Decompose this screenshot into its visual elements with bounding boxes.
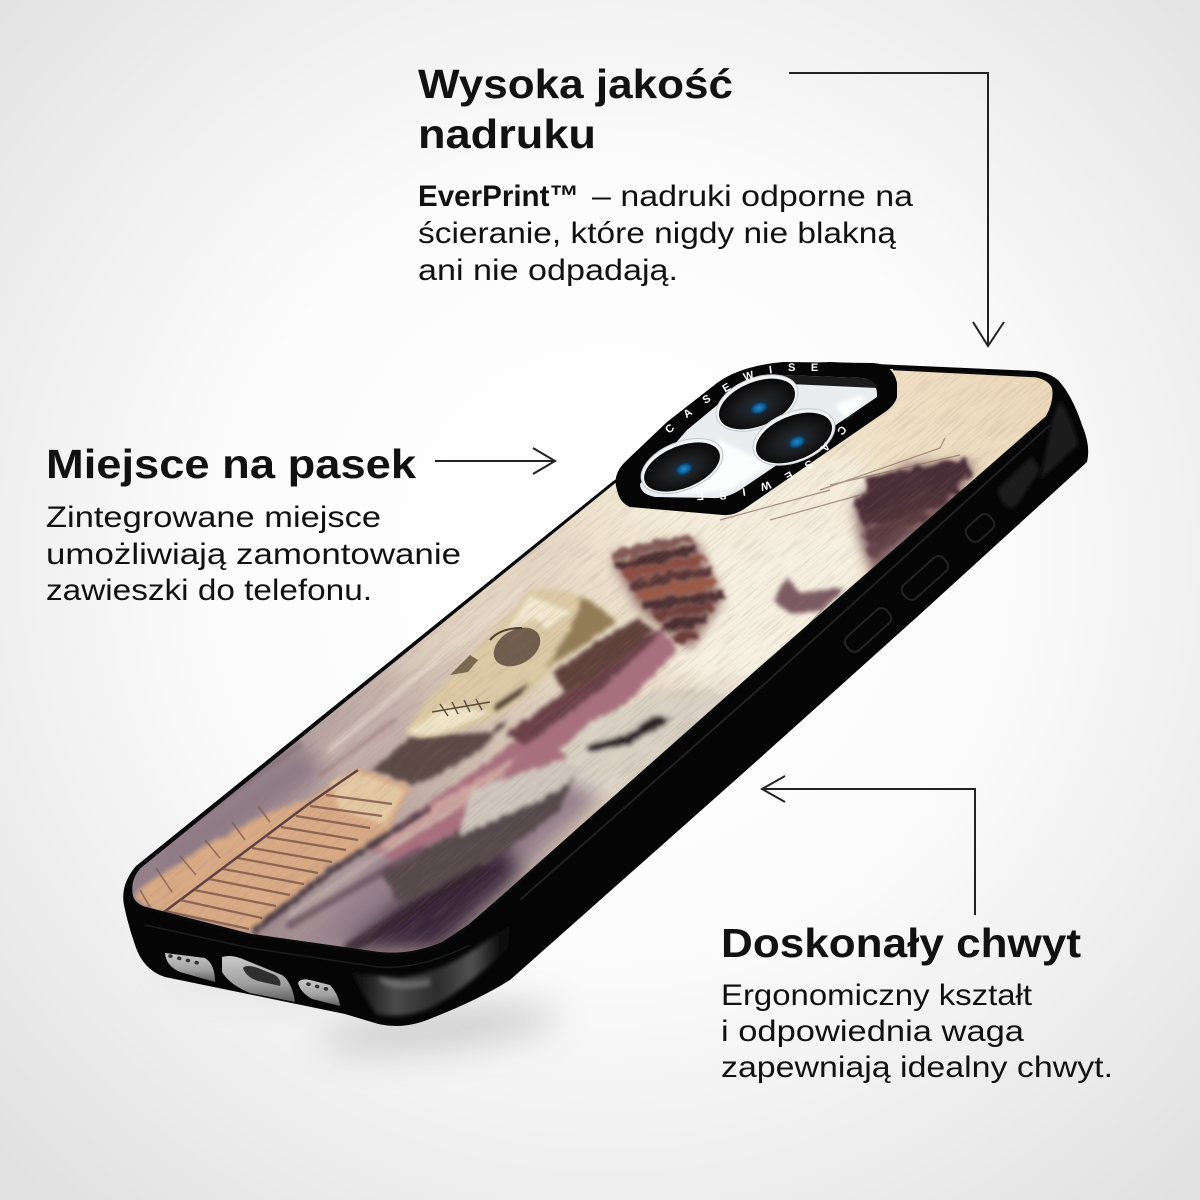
phone case illustration xyxy=(123,362,1088,1026)
arrow: to case side xyxy=(762,776,975,915)
ring wordmark xyxy=(666,363,846,500)
speaker left xyxy=(165,953,215,982)
body text: grip xyxy=(721,979,1113,1084)
dark collar xyxy=(372,718,510,785)
callout: print quality xyxy=(418,61,1004,346)
feather lines xyxy=(720,438,960,626)
callout: strap slot xyxy=(46,441,555,607)
printed artwork xyxy=(132,369,1052,953)
pink strip xyxy=(365,628,678,860)
body text: print quality: ani nie odpadają. xyxy=(418,254,678,287)
heading: print quality xyxy=(418,61,733,157)
lower feather shadow xyxy=(773,577,845,614)
speaker right xyxy=(298,979,340,1006)
feather: dark upper right xyxy=(857,468,970,555)
body text: grip: zapewniają idealny chwyt. xyxy=(721,1051,1113,1084)
body text: grip: i odpowiednia waga xyxy=(721,1015,1024,1048)
action button xyxy=(963,511,997,545)
body text: strap slot: zawieszki do telefonu. xyxy=(46,574,372,607)
feather: soft mass xyxy=(855,462,975,580)
body text: print quality xyxy=(418,180,913,287)
phone shadow xyxy=(155,960,561,1060)
body text: strap slot xyxy=(46,501,461,607)
strap slot xyxy=(997,456,1040,508)
skull xyxy=(405,588,655,737)
war bonnet soft mass xyxy=(612,540,722,650)
volume up xyxy=(899,553,951,603)
camera window xyxy=(640,375,877,498)
camera module xyxy=(616,362,897,516)
body text: print quality: EverPrint™ xyxy=(418,180,579,213)
rib border xyxy=(253,808,430,932)
canvas grain xyxy=(147,369,1052,944)
volume down xyxy=(842,605,894,655)
arrow: to print surface xyxy=(789,73,1004,346)
eye socket xyxy=(494,628,540,666)
print edge xyxy=(131,369,1054,954)
heading: print quality: Wysoka jakość xyxy=(418,61,733,107)
glossy bottom corner xyxy=(352,925,510,1016)
heading: grip: Doskonały chwyt xyxy=(721,920,1081,966)
body text: print quality: ścieranie, które nigdy nie blakną xyxy=(418,217,896,250)
side buttons xyxy=(842,511,997,655)
body text: print quality: – nadruki odporne na xyxy=(592,180,913,213)
fur xyxy=(380,690,740,905)
body text: grip: Ergonomiczny kształt xyxy=(721,979,1033,1012)
ring wordmark: CASEWISE xyxy=(697,426,846,500)
soft tonal regions xyxy=(150,450,880,950)
heading: strap slot: Miejsce na pasek xyxy=(46,441,416,487)
body text: strap slot: Zintegrowane miejsce xyxy=(46,501,381,534)
charging port xyxy=(222,956,295,1002)
callout: grip xyxy=(721,776,1113,1084)
arrow: to strap slot xyxy=(435,448,555,474)
ring wordmark: CASEWISE xyxy=(666,363,818,432)
lenses xyxy=(633,364,843,504)
mouth xyxy=(495,682,530,712)
hair band xyxy=(553,618,655,695)
nose xyxy=(450,655,478,675)
war bonnet xyxy=(612,538,722,640)
brush streaks xyxy=(180,590,520,948)
chest ribs xyxy=(133,768,430,933)
body text: strap slot: umożliwiają zamontowanie xyxy=(46,538,461,571)
heading: print quality: nadruku xyxy=(418,111,596,157)
case body xyxy=(123,362,1088,1026)
